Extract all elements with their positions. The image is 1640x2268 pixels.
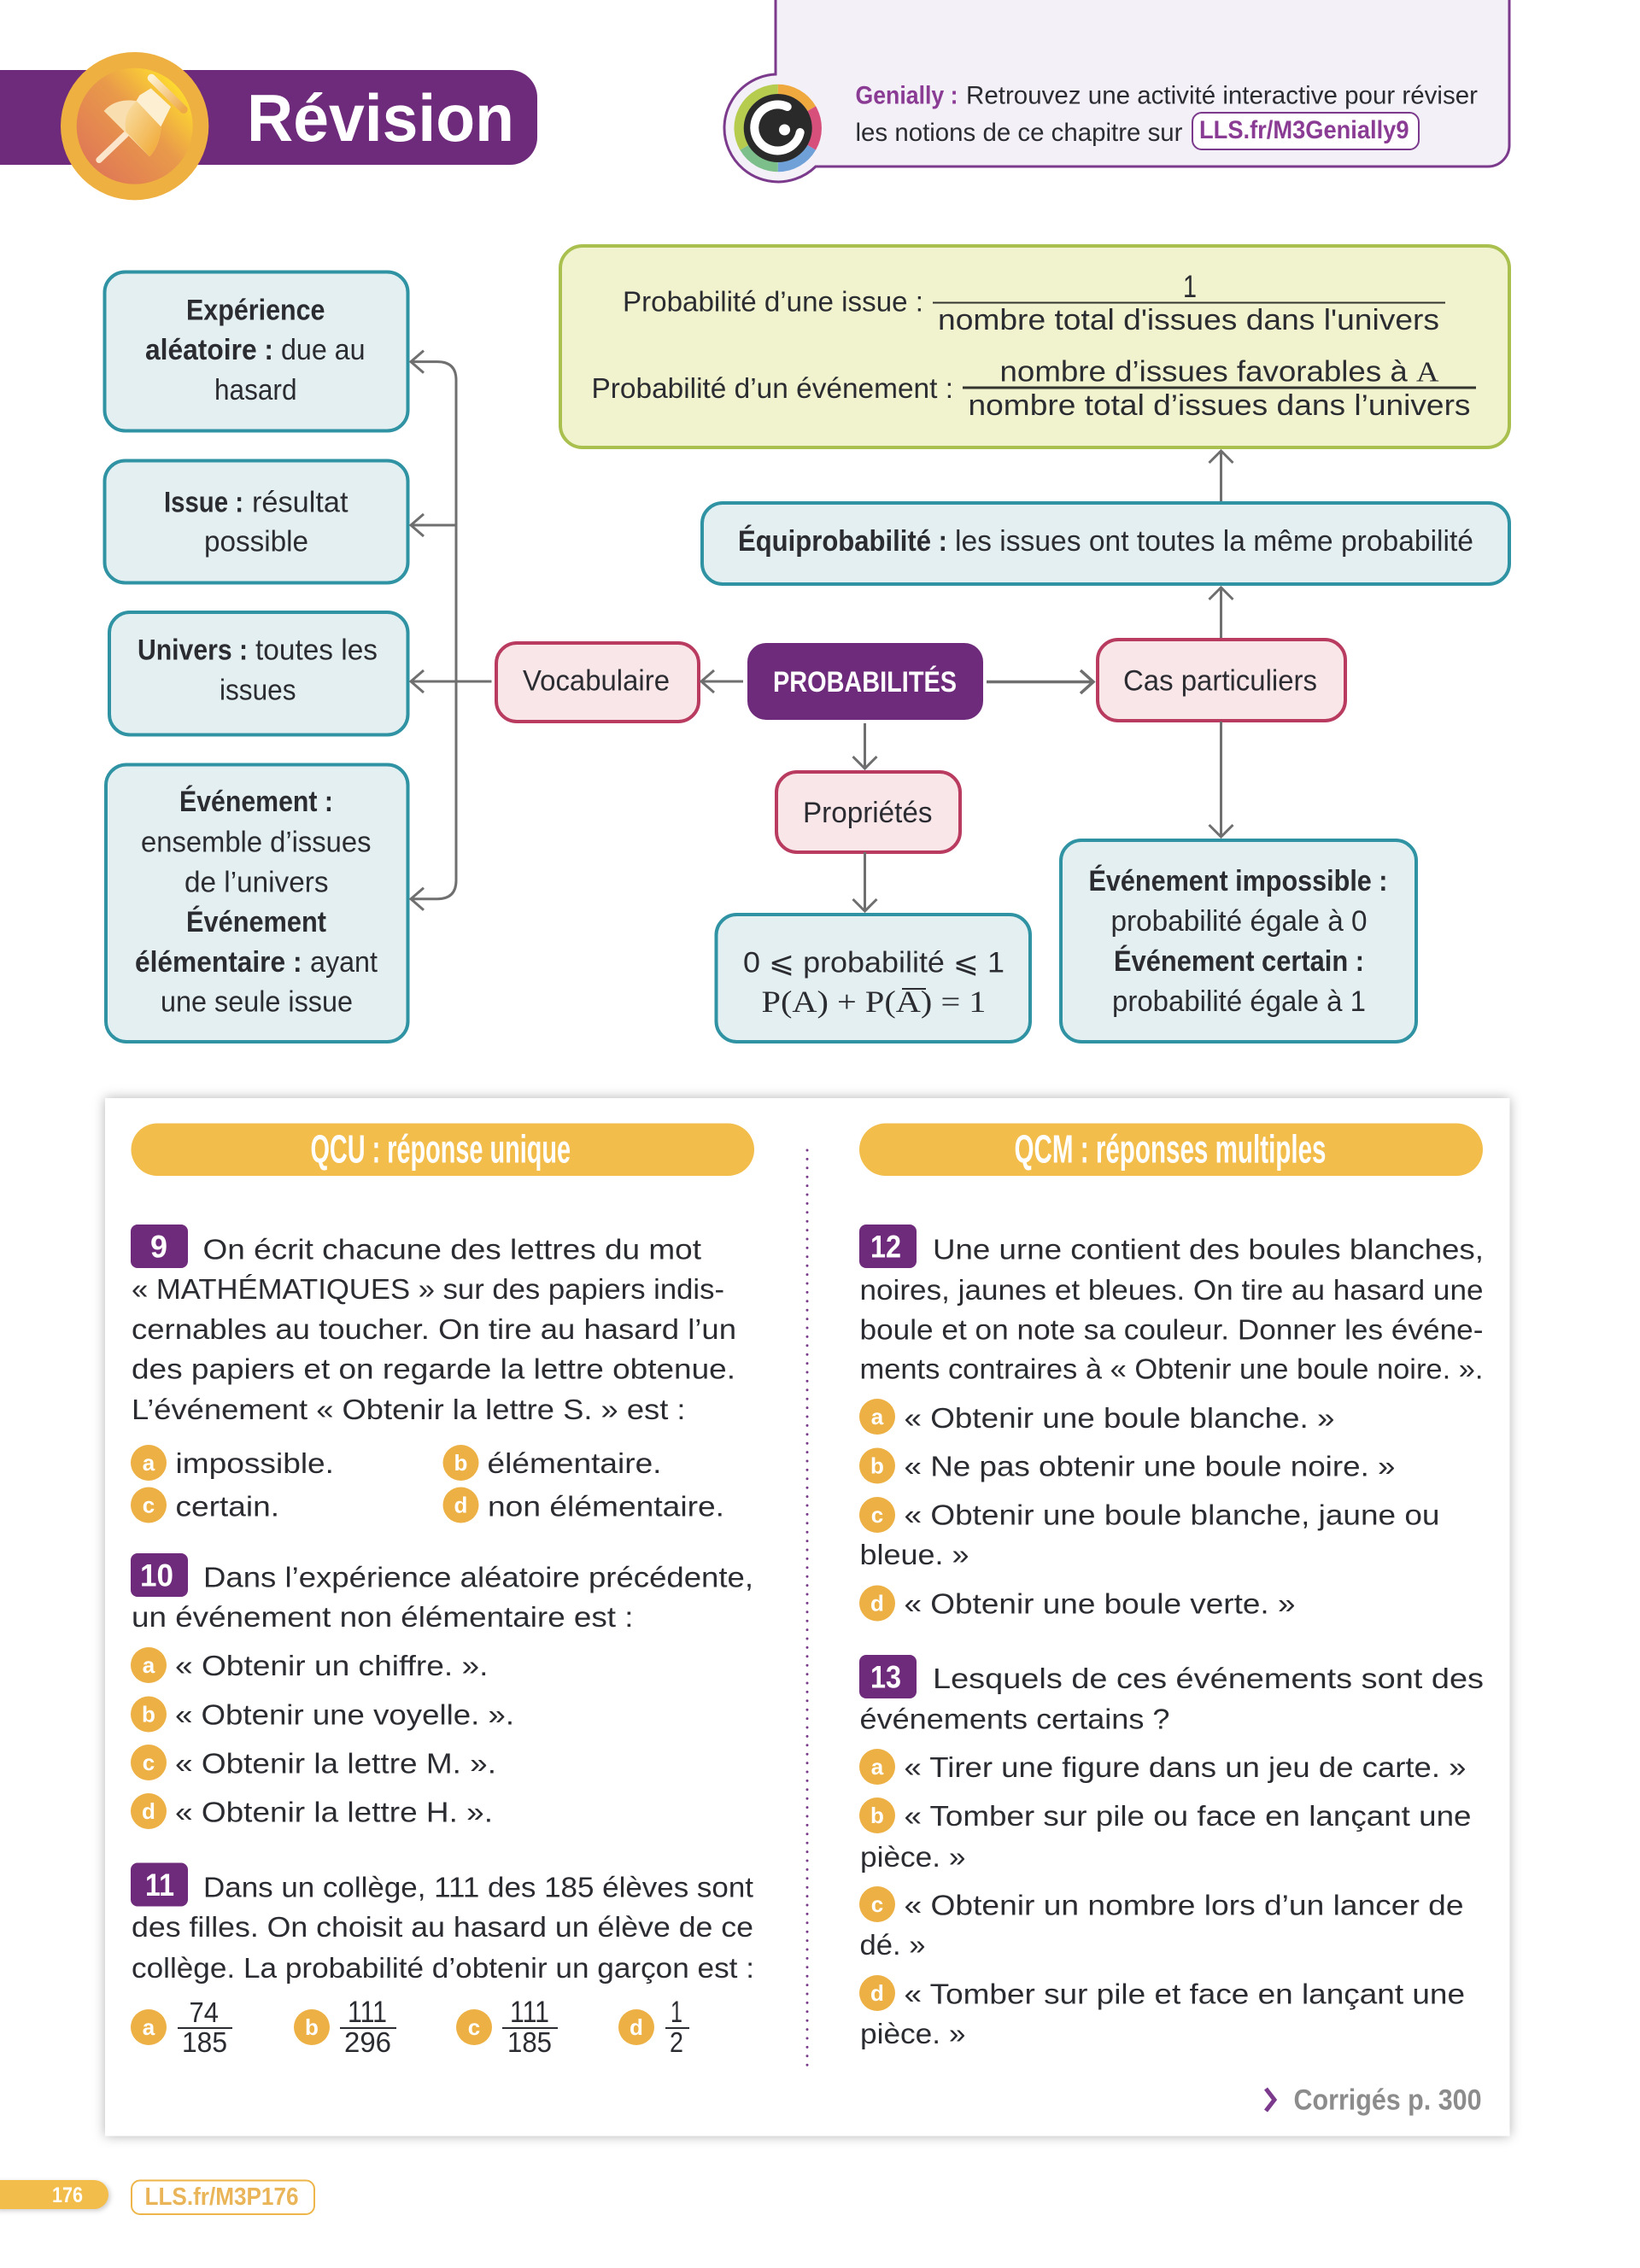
options of exercise 13: a: [871, 1754, 884, 1780]
box: Événement impossible / certain: Événement impossible :: [1088, 865, 1387, 897]
box: Propriétés: Propriétés: [803, 797, 933, 829]
options of exercise 10: a: [143, 1652, 155, 1678]
exercise 9: [131, 1225, 736, 1523]
options of exercise 10: c: [143, 1750, 155, 1775]
options of exercise 12: c: [871, 1502, 883, 1528]
box: Issue: possible: [204, 526, 308, 558]
exercise 12: boule et on note sa couleur. Donner les événe-: [859, 1313, 1483, 1346]
box: PROBABILITÉS: PROBABILITÉS: [773, 666, 957, 699]
arrow: probabilités to vocabulaire: [701, 670, 743, 693]
options of exercise 11: fractions: 111: [510, 1996, 549, 2029]
heading: QCM: [859, 1124, 1483, 1176]
options of exercise 13: pièce. »: [860, 2018, 965, 2049]
options of exercise 13: « Obtenir un nombre lors d’un lancer de: [904, 1889, 1464, 1921]
answers reference: Corrigés: Corrigés p. 300: [1293, 2084, 1481, 2116]
options of exercise 9: c: [143, 1493, 155, 1518]
box: Cas particuliers: Cas particuliers: [1123, 664, 1317, 697]
box: Événement impossible / certain: Événement certain :: [1114, 945, 1364, 978]
box: Expérience aléatoire: aléatoire :: [145, 334, 273, 366]
exercise 12: noires, jaunes et bleues. On tire au hasard une: [859, 1274, 1483, 1306]
box: Cas particuliers: [1098, 640, 1345, 721]
options of exercise 9: [131, 1445, 724, 1523]
formula: probability of an event: Probabilité d’un événement :: [591, 372, 953, 404]
options of exercise 11: fractions: b: [305, 2014, 319, 2040]
options of exercise 11: fractions: c: [468, 2014, 480, 2040]
options of exercise 11: fractions: 111: [348, 1996, 387, 2029]
options of exercise 9: élémentaire.: [487, 1447, 661, 1479]
panel: probability formulas: [560, 246, 1509, 447]
options of exercise 13: [859, 1749, 1471, 2049]
box: Événement: ensemble d’issues: [141, 827, 371, 859]
options of exercise 12: « Obtenir une boule verte. »: [904, 1588, 1295, 1619]
exercise 9: cernables au toucher. On tire au hasard l’un: [132, 1313, 736, 1345]
exercise 13: événements certains ?: [859, 1703, 1170, 1735]
box: Expérience aléatoire: [104, 272, 408, 430]
panel: QCU and QCM exercises: [105, 1098, 1510, 2136]
exercise 11: [131, 1863, 754, 2058]
exercise 9: On écrit chacune des lettres du mot: [203, 1233, 701, 1266]
options of exercise 10: d: [142, 1798, 155, 1824]
link badge: LLS.fr/M3Genially9: [1199, 116, 1409, 144]
options of exercise 13: c: [871, 1891, 883, 1917]
header band: Révision: [0, 70, 537, 165]
options of exercise 12: b: [870, 1453, 884, 1479]
options of exercise 13: b: [870, 1803, 884, 1828]
box: Événement: ayant: [310, 946, 378, 979]
options of exercise 9: b: [454, 1450, 467, 1476]
exercise 11: des filles. On choisit au hasard un élève de ce: [132, 1911, 753, 1943]
options of exercise 13: « Tirer une figure dans un jeu de carte. »: [904, 1751, 1466, 1783]
box: Issue: Issue :: [164, 487, 243, 519]
arrow: probabilités to propriétés: [852, 723, 876, 769]
options of exercise 11: fractions: 2: [670, 2026, 683, 2058]
box: Issue: résultat: [252, 487, 348, 519]
options of exercise 11: fractions: a: [143, 2014, 155, 2040]
options of exercise 11: fractions: 1: [671, 1996, 682, 2029]
exercise 9: « MATHÉMATIQUES » sur des papiers indis-: [132, 1273, 724, 1305]
panel: Genially callout: [724, 0, 1509, 182]
box: Univers: Univers :: [138, 634, 248, 666]
heading: QCU: [132, 1124, 754, 1176]
exercise 11: Dans un collège, 111 des 185 élèves sont: [203, 1872, 753, 1903]
options of exercise 12: « Ne pas obtenir une boule noire. »: [904, 1450, 1396, 1482]
options of exercise 9: certain.: [176, 1491, 279, 1522]
options of exercise 11: fractions: 185: [182, 2026, 227, 2058]
heading: QCU: QCU : réponse unique: [311, 1127, 571, 1172]
box: Événement: [106, 765, 408, 1042]
options of exercise 9: non élémentaire.: [488, 1491, 724, 1522]
options of exercise 13: dé. »: [859, 1929, 926, 1961]
box: Expérience aléatoire: due au: [281, 334, 366, 366]
options of exercise 12: « Obtenir une boule blanche, jaune ou: [904, 1499, 1440, 1530]
options of exercise 10: « Obtenir une voyelle. ».: [175, 1699, 514, 1730]
box: properties formulas: [716, 915, 1030, 1042]
options of exercise 12: [859, 1399, 1440, 1621]
icon: Genially logo: [739, 89, 817, 167]
box: properties formulas: P(A) + P(A) = 1: [762, 985, 986, 1019]
options of exercise 13: d: [870, 1980, 884, 2006]
box: Expérience aléatoire: Expérience: [186, 294, 325, 326]
exercise 13: Lesquels de ces événements sont des: [933, 1663, 1484, 1694]
callout text line 1: Retrouvez une activité interactive pour réviser: [966, 82, 1478, 109]
box: Événement impossible / certain: [1061, 840, 1416, 1042]
formula: probability of an outcome: [623, 269, 1445, 336]
box: Univers: [109, 612, 408, 734]
options of exercise 11: fractions: 185: [507, 2026, 552, 2058]
icon: push pin medallion: [61, 52, 208, 200]
options of exercise 11: fractions: 74: [190, 1996, 219, 2028]
box: Vocabulaire: [496, 643, 699, 722]
exercise 12: ments contraires à « Obtenir une boule noire. ».: [859, 1353, 1483, 1385]
options of exercise 13: « Tomber sur pile et face en lançant une: [904, 1978, 1465, 2010]
exercise 13: 13: [870, 1660, 901, 1694]
exercise 11: collège. La probabilité d’obtenir un garçon est :: [132, 1952, 754, 1984]
exercise 10: [131, 1553, 753, 1829]
arrows: bracket from Vocabulaire to definitions: [411, 351, 492, 910]
box: Événement: de l’univers: [184, 866, 328, 898]
options of exercise 10: « Obtenir la lettre H. ».: [175, 1797, 493, 1827]
formula: probability of an event: [591, 355, 1476, 422]
box: Événement: élémentaire :: [135, 946, 302, 979]
options of exercise 12: a: [871, 1404, 884, 1429]
page number tab: 176: [52, 2183, 83, 2207]
options of exercise 12: « Obtenir une boule blanche. »: [904, 1402, 1334, 1434]
exercise 13: [859, 1655, 1484, 2049]
box: Univers: issues: [220, 675, 296, 707]
options of exercise 13: pièce. »: [860, 1841, 965, 1873]
formula: probability of an event: nombre total d’issues dans l’univers: [969, 389, 1471, 422]
options of exercise 11: fractions: [131, 1996, 689, 2058]
box: Événement impossible / certain: probabilité égale à 0: [1110, 905, 1367, 938]
arrow: propriétés to formula: [852, 852, 876, 911]
exercise 12: [859, 1225, 1484, 1621]
formula: probability of an outcome: Probabilité d’une issue :: [623, 285, 923, 318]
title: Révision: [247, 80, 514, 155]
options of exercise 10: « Obtenir la lettre M. ».: [175, 1747, 496, 1780]
options of exercise 10: « Obtenir un chiffre. ».: [175, 1650, 489, 1681]
box: Vocabulaire: Vocabulaire: [523, 664, 670, 697]
callout text line 1: Genially :: [856, 82, 958, 109]
box: Équiprobabilité: [702, 503, 1509, 584]
link badge: LLS.fr/M3P176: LLS.fr/M3P176: [145, 2183, 299, 2211]
arrow: probabilités to cas particuliers: [987, 670, 1093, 693]
exercise 11: 11: [145, 1868, 174, 1903]
arrow: equiprobability to formulas: [1210, 451, 1233, 502]
page number tab: [0, 2180, 108, 2209]
box: Univers: toutes les: [255, 634, 378, 666]
box: Événement: Événement: [186, 906, 326, 938]
box: Équiprobabilité: les issues ont toutes la même probabilité: [955, 525, 1473, 558]
options of exercise 9: impossible.: [176, 1447, 334, 1479]
options of exercise 11: fractions: 296: [344, 2026, 391, 2058]
box: Événement impossible / certain: probabilité égale à 1: [1112, 985, 1366, 1018]
exercise 9: 9: [150, 1230, 167, 1264]
box: Événement: une seule issue: [161, 985, 353, 1018]
box: Expérience aléatoire: hasard: [214, 374, 297, 406]
formula: probability of an outcome: 1: [1183, 269, 1197, 304]
formula: probability of an outcome: nombre total d'issues dans l'univers: [938, 304, 1439, 336]
heading: QCM: QCM : réponses multiples: [1015, 1127, 1326, 1172]
callout text line 2: les notions de ce chapitre sur: [856, 119, 1182, 147]
options of exercise 9: d: [454, 1493, 467, 1518]
exercise 9: L’événement « Obtenir la lettre S. » est :: [132, 1394, 685, 1425]
options of exercise 11: fractions: d: [630, 2014, 643, 2040]
box: PROBABILITÉS: [747, 643, 983, 720]
exercise 10: 10: [140, 1558, 173, 1593]
box: properties formulas: 0 ⩽ probabilité ⩽ 1: [743, 946, 1004, 979]
box: Événement: Événement :: [179, 786, 333, 818]
exercise 12: Une urne contient des boules blanches,: [933, 1233, 1484, 1266]
box: Équiprobabilité: Équiprobabilité :: [738, 525, 947, 558]
options of exercise 9: a: [143, 1450, 155, 1476]
exercise 10: un événement non élémentaire est :: [132, 1601, 634, 1633]
options of exercise 12: bleue. »: [859, 1539, 969, 1570]
exercise 9: des papiers et on regarde la lettre obtenue.: [132, 1353, 735, 1385]
box: Propriétés: [776, 772, 960, 852]
exercise 10: Dans l’expérience aléatoire précédente,: [203, 1561, 753, 1593]
options of exercise 13: « Tomber sur pile ou face en lançant une: [904, 1800, 1471, 1832]
box: Issue: [104, 461, 408, 582]
options of exercise 10: b: [142, 1701, 155, 1727]
options of exercise 12: d: [870, 1590, 884, 1616]
exercise 12: 12: [870, 1230, 901, 1264]
options of exercise 10: [131, 1647, 514, 1829]
formula: probability of an event: nombre d’issues favorables à A: [999, 355, 1439, 388]
arrow: special cases to equiprobability: [1210, 587, 1233, 639]
arrow: cas particuliers to impossible/certain: [1210, 722, 1233, 837]
